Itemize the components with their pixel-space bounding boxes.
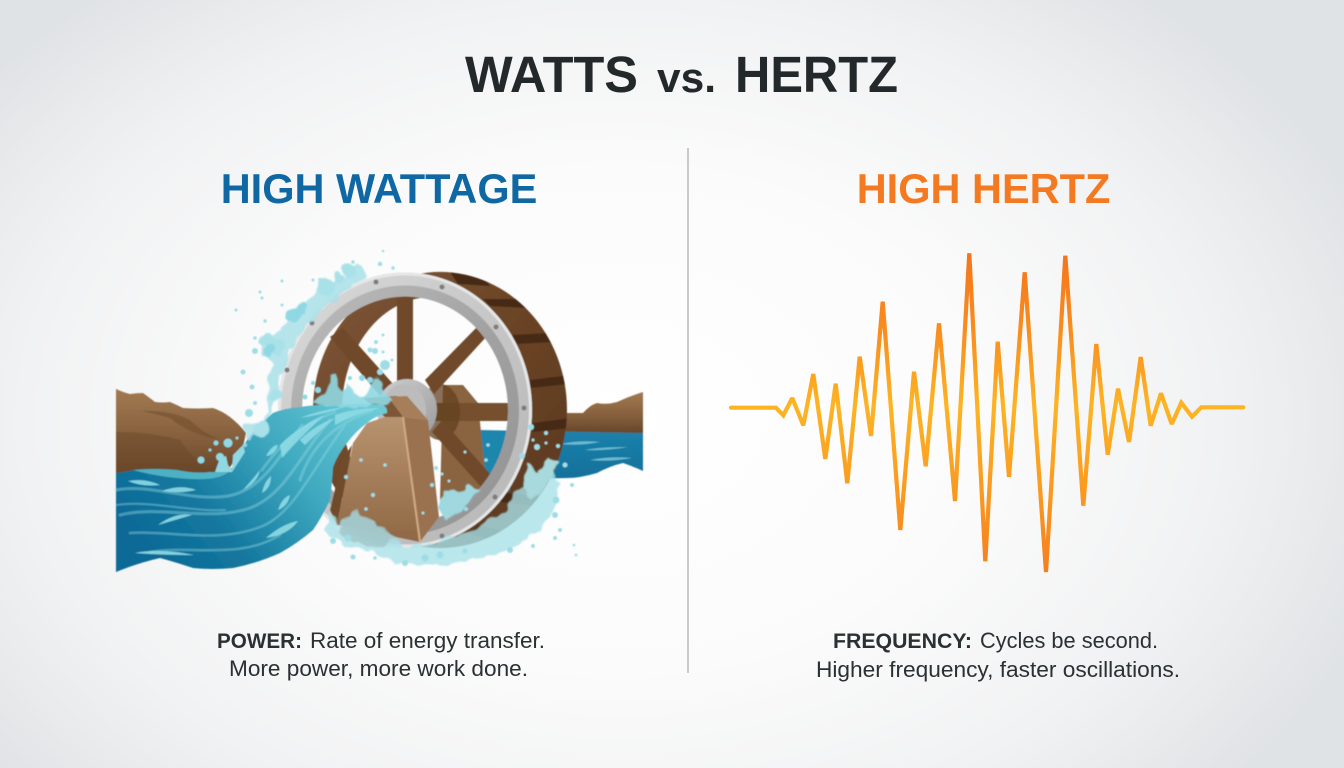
title [465,46,898,103]
wheel metal rim [280,274,530,546]
water spray at top of fall [198,375,392,472]
panel: high hertz [731,165,1243,682]
divider between panels [687,148,689,673]
illustration: water wheel [116,250,643,572]
description: frequency: Cycles be second. [980,628,1158,653]
water behind wheel [470,432,510,520]
description: power: Rate of energy transfer. [310,628,545,653]
water splash upper left [242,263,365,440]
rear support post [440,385,487,500]
wheel back rim with slats [313,272,570,548]
panel: high wattage [116,165,643,681]
wheel spokes [330,296,492,488]
description: frequency [816,628,1180,682]
rim bolts [284,280,526,538]
description: power: More power, more work done. [229,656,528,681]
wheel hub [377,379,437,441]
description: power: POWER: [217,630,302,653]
water splash around wheel base [325,424,577,566]
right bank [565,392,643,434]
left bank [116,389,246,476]
description: power [217,628,545,681]
chart: waveform [731,253,1243,572]
description: frequency: FREQUENCY: [833,630,972,653]
heading: high wattage: HIGH WATTAGE [221,165,537,212]
description: frequency: Higher frequency, faster oscillations. [816,657,1180,682]
heading: high hertz: HIGH HERTZ [857,165,1110,212]
title: WATTS [465,46,638,103]
right river [478,430,643,480]
waterfall and river [116,404,387,572]
axle [430,403,512,421]
title: vs. [657,54,716,101]
water droplets upper left [234,250,395,417]
title: HERTZ [735,46,898,103]
water pier [330,396,439,542]
